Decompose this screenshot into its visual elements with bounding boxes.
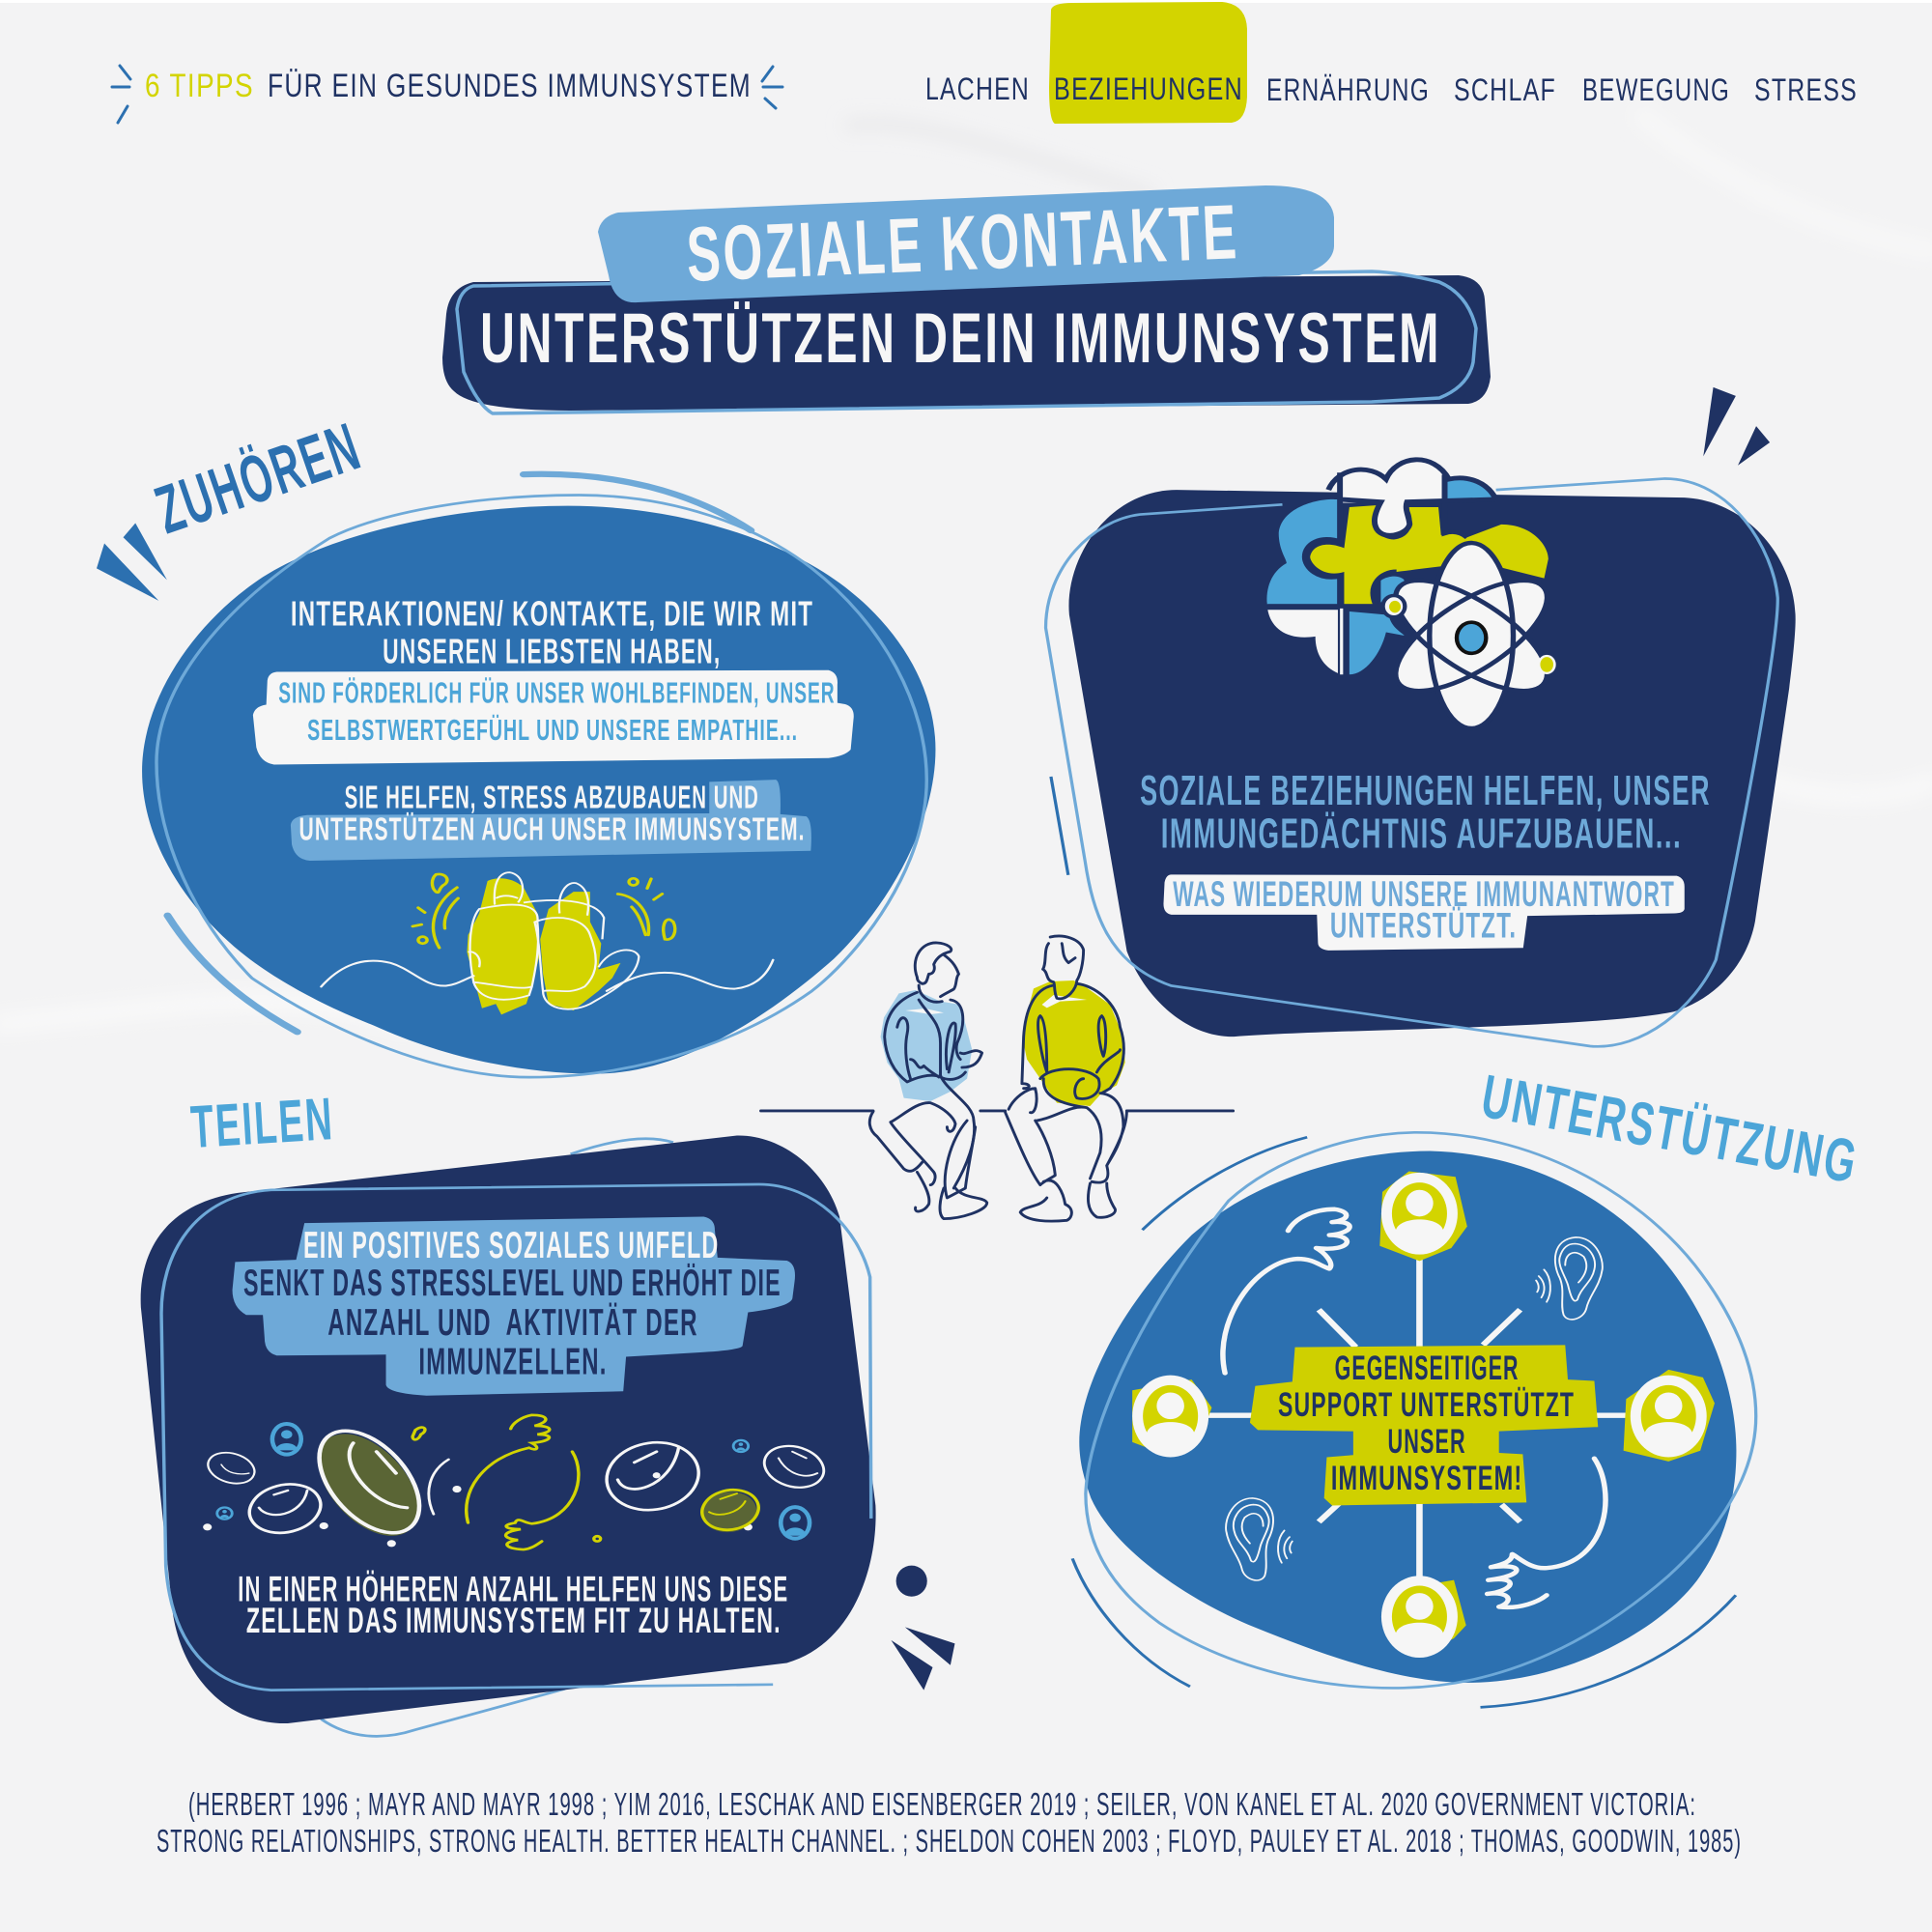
tab: Bewegung: BEWEGUNG [1582, 72, 1730, 107]
icon: helping hand bottom [1488, 1459, 1605, 1607]
icon: atom [1373, 543, 1570, 728]
icon: spikes [1703, 387, 1770, 466]
icon: right sparkle [762, 67, 782, 108]
illustration: immune cells [201, 1415, 834, 1549]
blue sweater colour [881, 990, 972, 1101]
outline behind [321, 1139, 673, 1736]
active tab highlight [1049, 2, 1247, 124]
icon: left sparkle [112, 66, 130, 123]
tab: Lachen: LACHEN [925, 71, 1030, 106]
title line 1: SOZIALE KONTAKTE [685, 188, 1240, 298]
panel: zuhören: SIE HELFEN, STRESS ABZUBAUEN UND [345, 781, 759, 815]
icon: puzzle brain [1267, 460, 1548, 674]
main title [442, 185, 1491, 413]
tab: Beziehungen: BEZIEHUNGEN [1054, 71, 1243, 106]
accent line [1051, 777, 1068, 875]
header: tips title [112, 66, 782, 123]
text: plaque line 3: UNSER [1388, 1424, 1466, 1461]
icon: dot and spikes [891, 1566, 954, 1690]
panel: teilen: ANZAHL UND AKTIVITÄT DER [327, 1301, 698, 1344]
blob background [141, 1136, 876, 1723]
title line 2: UNTERSTÜTZEN DEIN IMMUNSYSTEM [480, 299, 1441, 378]
illustration: two people talking on a bench [761, 936, 1234, 1221]
title banner navy [442, 275, 1491, 411]
title banner outline [457, 271, 1476, 413]
icon: person right [1624, 1370, 1715, 1462]
central yellow plaque [1250, 1345, 1598, 1505]
title banner light blue [598, 185, 1334, 302]
blob outline [156, 495, 926, 1077]
panel: zuhören: UNSEREN LIEBSTEN HABEN, [383, 632, 721, 670]
header heading navy: FÜR EIN GESUNDES IMMUNSYSTEM [268, 68, 752, 104]
panel: teilen: IN EINER HÖHEREN ANZAHL HELFEN UNS DIESE [238, 1570, 788, 1609]
tab: Schlaf: SCHLAF [1454, 72, 1556, 107]
icon: person bottom [1381, 1576, 1466, 1658]
blob background [1079, 1151, 1736, 1683]
text: intro line 1: INTERAKTIONEN/ KONTAKTE, DIE WIR MIT [291, 595, 813, 634]
panel: zuhören [97, 474, 935, 1077]
navigation tabs [925, 2, 1858, 124]
panel heading: Zuhören: ZUHÖREN [146, 408, 370, 548]
panel: teilen: SENKT DAS STRESSLEVEL UND ERHÖHT DIE [243, 1262, 781, 1304]
panel: unterstützung: GEGENSEITIGER [1335, 1350, 1520, 1387]
panel: teilen [141, 1136, 954, 1736]
yellow sweater colour [1024, 980, 1125, 1106]
panel: zuhören: SIND FÖRDERLICH FÜR UNSER WOHLBEFINDEN, UNSER [278, 677, 836, 710]
icon: person left [1132, 1376, 1211, 1457]
text: plaque line 2: SUPPORT UNTERSTÜTZT [1278, 1387, 1575, 1424]
panel: zuhören: UNTERSTÜTZEN AUCH UNSER IMMUNSYSTEM. [299, 811, 806, 847]
blob outline [161, 1184, 871, 1690]
light blue highlight [291, 780, 811, 861]
footer: references [156, 1786, 1742, 1859]
panel: teilen: ZELLEN DAS IMMUNSYSTEM FIT ZU HALTEN. [246, 1601, 781, 1641]
text: highlighted line 2: SELBSTWERTGEFÜHL UND UNSERE EMPATHIE... [307, 714, 798, 747]
panel heading: Teilen: TEILEN [189, 1086, 336, 1161]
white highlight [1163, 874, 1685, 951]
text: plaque line 4: IMMUNSYSTEM! [1331, 1461, 1522, 1497]
icon: ear top [1536, 1237, 1603, 1320]
accent arcs [1072, 1137, 1736, 1707]
illustration: couple from behind [321, 872, 773, 1014]
blob background [1068, 490, 1796, 1037]
network lines [1208, 1252, 1632, 1580]
header heading yellow: 6 TIPPS [145, 68, 254, 104]
icon: spikes [97, 524, 167, 601]
panel: teilen: EIN POSITIVES SOZIALES UMFELD [303, 1223, 720, 1266]
sweater highlights [905, 995, 1087, 1014]
icon: helping hand top [1223, 1209, 1350, 1373]
panel: soziale beziehungen [1046, 387, 1796, 1046]
icon: ear bottom [1226, 1498, 1293, 1580]
line drawing [761, 936, 1234, 1221]
panel: teilen: IMMUNZELLEN. [418, 1340, 608, 1382]
light blue highlight [233, 1216, 795, 1396]
tab: Stress: STRESS [1754, 72, 1858, 107]
blob background [142, 506, 935, 1074]
blob outline [1086, 1132, 1756, 1688]
white highlight [253, 670, 854, 764]
accent arcs [167, 474, 751, 1032]
text: highlight line 2: UNTERSTÜTZT. [1330, 904, 1517, 946]
blob outline [1046, 479, 1777, 1046]
icon: person top [1379, 1171, 1467, 1261]
tab: Ernährung: ERNÄHRUNG [1266, 72, 1430, 107]
panel: unterstützung [1072, 1132, 1756, 1707]
